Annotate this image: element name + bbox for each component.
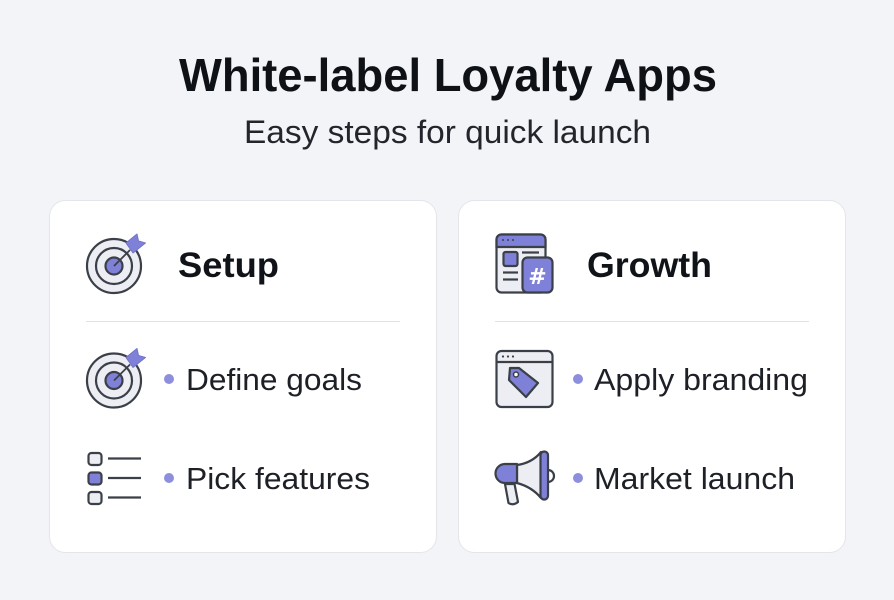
panel: setup	[50, 200, 436, 552]
icon: target small	[87, 348, 146, 408]
icon: browser with tag	[496, 351, 552, 407]
icon: checklist	[88, 453, 141, 504]
icon: megaphone	[496, 452, 554, 504]
panel: growth	[458, 200, 846, 552]
bullet: apply branding	[573, 374, 583, 384]
icon: browser with hash badge: #	[528, 265, 547, 290]
bullet: define goals	[164, 374, 174, 384]
heading: growth: Growth	[587, 246, 712, 285]
subtitle: Easy steps for quick launch	[244, 114, 651, 150]
text: market launch: Market launch	[594, 461, 795, 496]
bullet: pick features	[164, 473, 174, 483]
title: White-label Loyalty Apps	[179, 49, 717, 101]
text: pick features: Pick features	[186, 461, 370, 496]
heading: setup: Setup	[178, 246, 279, 285]
icon: target	[87, 234, 146, 293]
icon: browser with hash badge	[496, 234, 552, 292]
text: define goals: Define goals	[186, 362, 362, 397]
bullet: market launch	[573, 473, 583, 483]
text: apply branding: Apply branding	[594, 362, 808, 397]
